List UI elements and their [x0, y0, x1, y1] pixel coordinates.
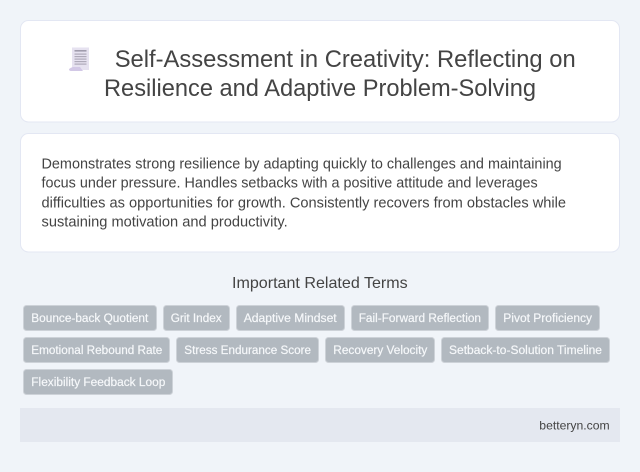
tag: Flexibility Feedback Loop: Flexibility Feedback Loop: [31, 375, 165, 389]
tag: Stress Endurance Score: Stress Endurance Score: [184, 343, 311, 357]
panel: description card: [20, 134, 620, 252]
tag: Fail-Forward Reflection: [352, 306, 488, 330]
tag: Adaptive Mindset: Adaptive Mindset: [244, 311, 337, 325]
tag: Emotional Rebound Rate: [24, 338, 170, 362]
tag: Fail-Forward Reflection: Fail-Forward Reflection: [359, 311, 481, 325]
description text: sustaining motivation and productivity.: [42, 215, 288, 231]
tag: Setback-to-Solution Timeline: [442, 338, 610, 362]
title: Self-Assessment in Creativity: Reflecting on: [115, 46, 576, 73]
description text: difficulties as opportunities for growth. Consistently recovers from obstacles while: [42, 195, 566, 211]
tag: Stress Endurance Score: [176, 338, 318, 362]
icon: scroll document: [69, 48, 89, 71]
tag: Bounce-back Quotient: [24, 306, 156, 330]
tag: Emotional Rebound Rate: Emotional Rebound Rate: [31, 343, 162, 357]
tag: Recovery Velocity: Recovery Velocity: [333, 343, 428, 357]
footer bar: [20, 408, 620, 442]
panel: title card: [20, 20, 620, 122]
tag: Pivot Proficiency: Pivot Proficiency: [503, 311, 593, 325]
description text: focus under pressure. Handles setbacks with a positive attitude and leverages: [42, 176, 538, 192]
tag: Pivot Proficiency: [496, 306, 600, 330]
title: Resilience and Adaptive Problem-Solving: [104, 75, 536, 102]
tag: Grit Index: Grit Index: [171, 311, 222, 325]
description text: [42, 156, 566, 231]
heading: related terms: Important Related Terms: [232, 275, 408, 292]
tag list: [24, 306, 610, 394]
description text: Demonstrates strong resilience by adapting quickly to challenges and maintaining: [42, 156, 562, 172]
tag: Adaptive Mindset: [236, 306, 344, 330]
title: [104, 46, 576, 102]
tag: Grit Index: [164, 306, 230, 330]
tag: Setback-to-Solution Timeline: Setback-to-Solution Timeline: [449, 343, 602, 357]
tag: Flexibility Feedback Loop: [24, 370, 172, 394]
tag: Bounce-back Quotient: Bounce-back Quotient: [31, 311, 149, 325]
tag: Recovery Velocity: [326, 338, 434, 362]
footer source text: betteryn.com: [539, 418, 610, 432]
